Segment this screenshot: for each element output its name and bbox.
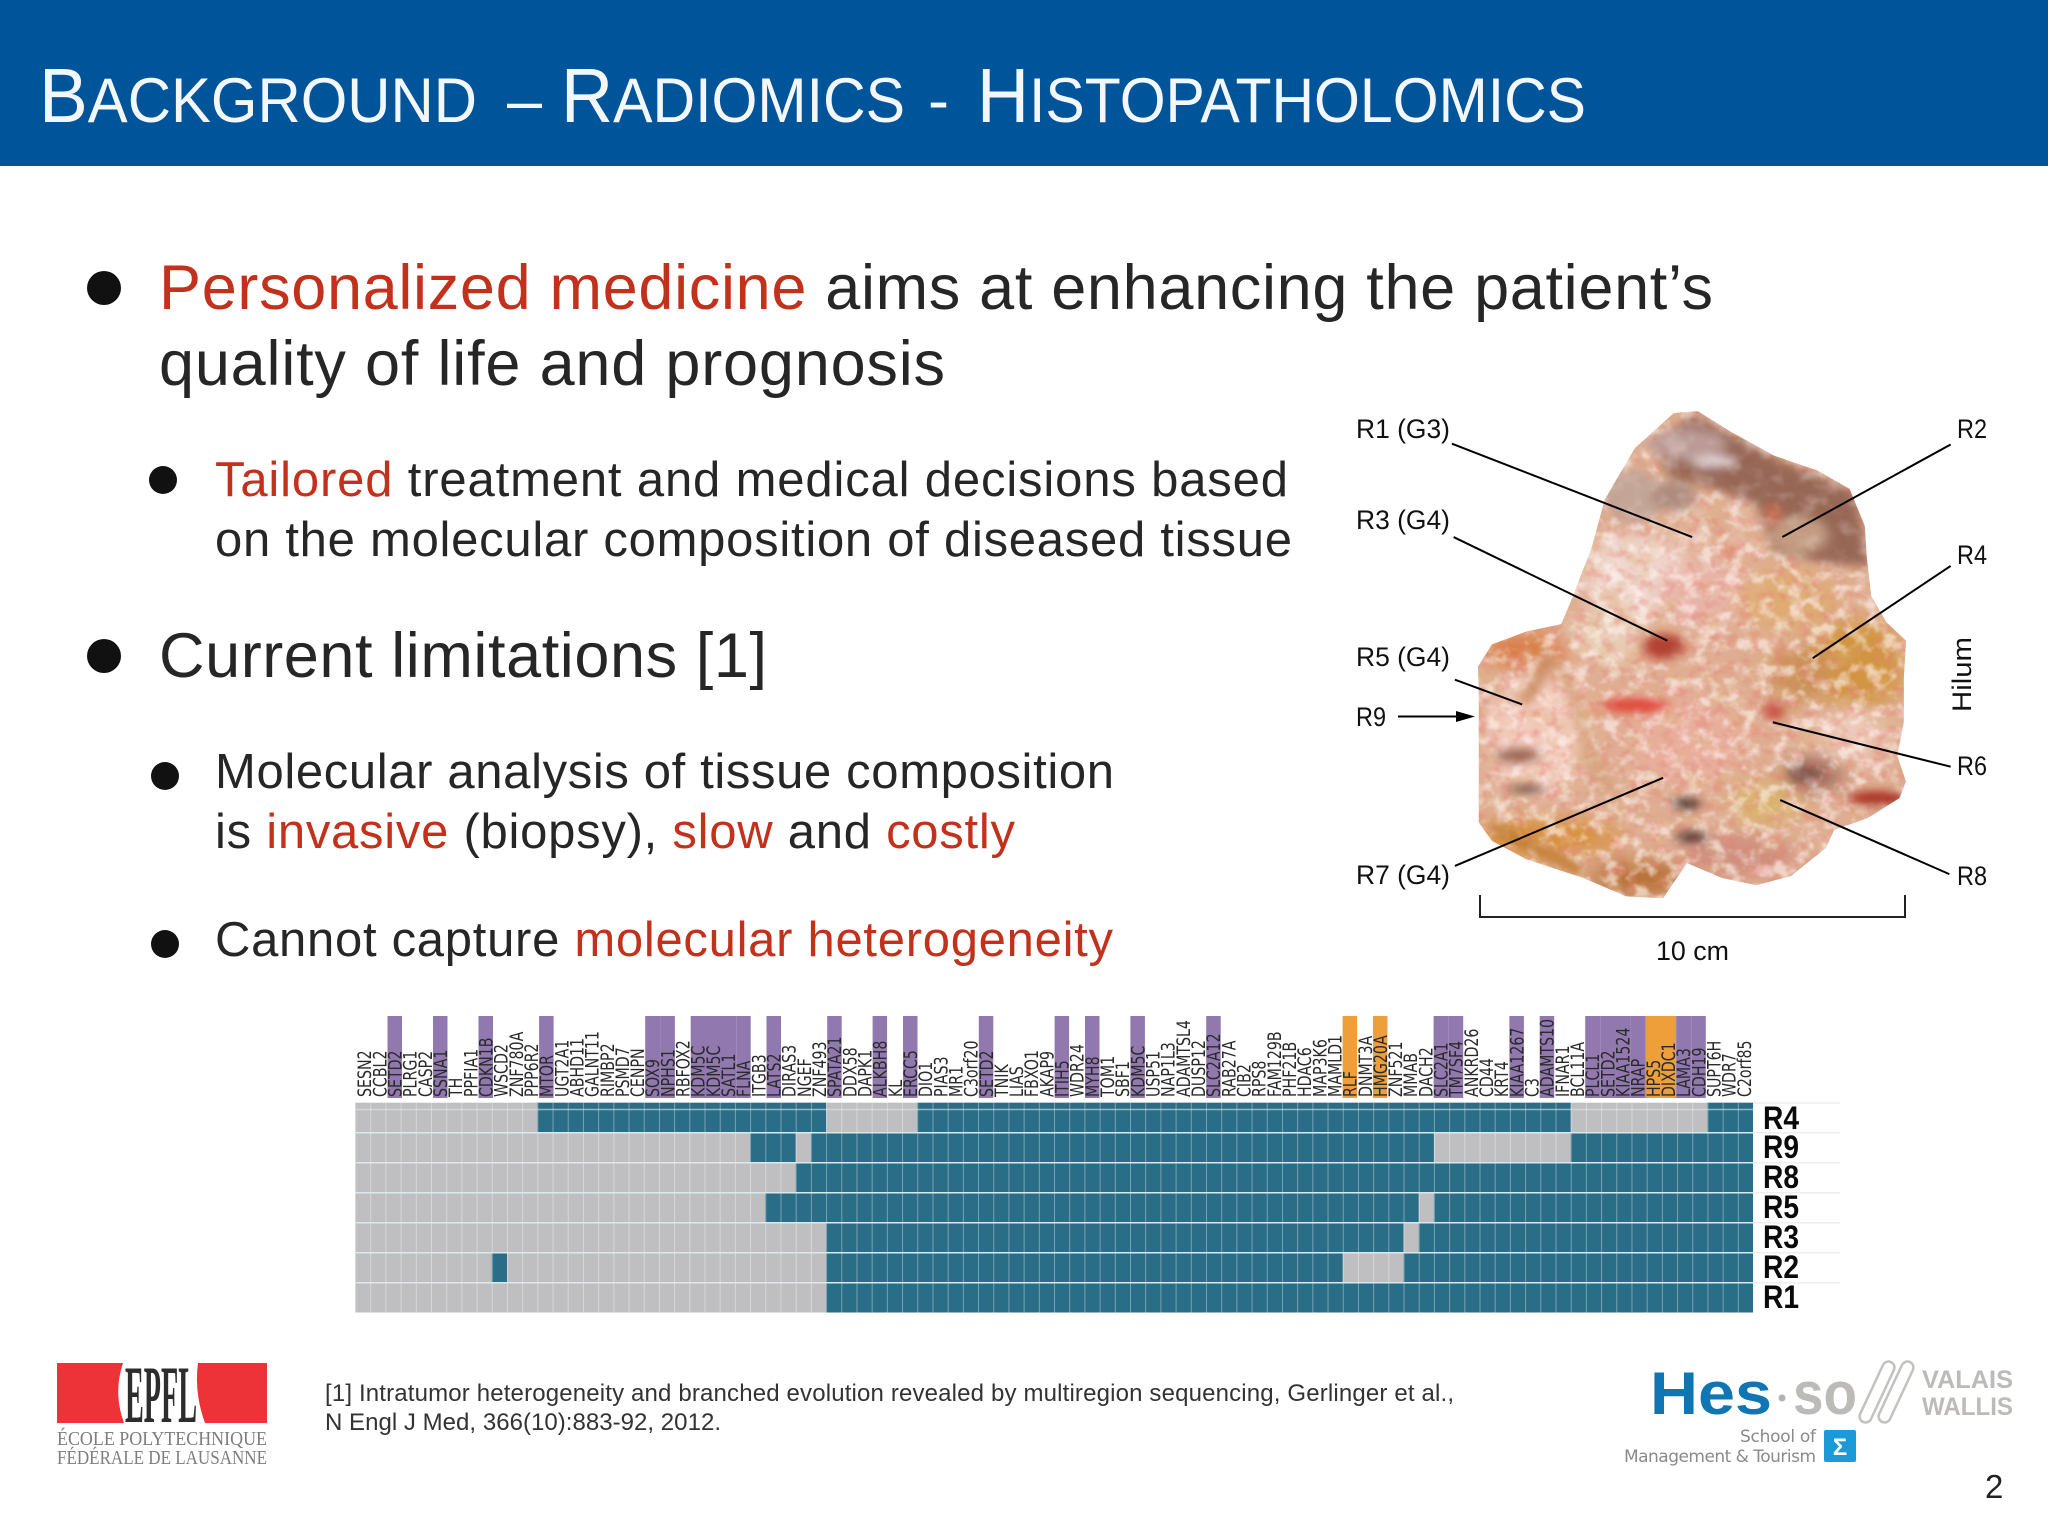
tumor region labels: R8 bbox=[1957, 861, 1987, 891]
sub-bullet: invasive slow costly bbox=[151, 745, 1114, 859]
gene name labels: SESN2 bbox=[354, 1050, 376, 1097]
gene name labels: DDX58 bbox=[840, 1047, 861, 1097]
logo: HES-SO Valais Wallis: VALAIS bbox=[1922, 1366, 2013, 1394]
gene name labels: PLRG1 bbox=[400, 1051, 421, 1097]
gene name labels: DIXDC1 bbox=[1658, 1042, 1679, 1097]
gene name labels: FAM129B bbox=[1264, 1031, 1285, 1097]
gene name labels: HDAC6 bbox=[1294, 1047, 1316, 1097]
gene name labels: LIAS bbox=[1006, 1066, 1028, 1097]
gene name labels: HMG20A bbox=[1370, 1035, 1391, 1097]
gene name labels: DAPK1 bbox=[855, 1050, 876, 1097]
gene name labels: SBF1 bbox=[1112, 1061, 1134, 1097]
bullet: current limitations: Current limitations [1] bbox=[159, 621, 767, 691]
sub-bullet: invasive slow costly: Molecular analysis of tissue composition bbox=[215, 745, 1114, 799]
gene name labels: ANKRD26 bbox=[1461, 1029, 1482, 1097]
tumor annotation lines bbox=[1452, 444, 1951, 874]
tumor region labels: R5 (G4) bbox=[1356, 642, 1450, 672]
gene name labels: ZNF493 bbox=[809, 1041, 830, 1097]
gene name labels: DUSP12 bbox=[1188, 1040, 1209, 1097]
gene name labels: MAMLD1 bbox=[1325, 1035, 1346, 1097]
heatmap row labels: R4 bbox=[1763, 1100, 1799, 1136]
gene name labels: PPFIA1 bbox=[461, 1049, 482, 1097]
gene name labels: SATL1 bbox=[718, 1054, 739, 1097]
gene name labels: KDM5C bbox=[1128, 1046, 1149, 1097]
gene name labels: PLCL1 bbox=[1582, 1054, 1604, 1097]
gene name labels: DIO1 bbox=[915, 1062, 937, 1097]
gene name labels: ERCC5 bbox=[900, 1050, 921, 1097]
tumor region labels: R2 bbox=[1957, 414, 1987, 444]
gene name labels: DACH2 bbox=[1416, 1047, 1437, 1097]
tumor region labels: 10 cm bbox=[1656, 936, 1729, 966]
title: – bbox=[507, 66, 542, 136]
gene name labels: HPS5 bbox=[1643, 1060, 1664, 1097]
gene name labels: ZNF780A bbox=[506, 1031, 527, 1097]
gene name labels: KDM5C bbox=[703, 1046, 724, 1097]
gene name labels: RPS8 bbox=[1249, 1061, 1270, 1097]
gene name labels: CDKN1B bbox=[476, 1037, 497, 1097]
logo: EPFL: EPFL bbox=[125, 1349, 197, 1440]
gene name labels: IFNAR1 bbox=[1552, 1045, 1573, 1097]
gene name labels: UGT2A1 bbox=[552, 1040, 573, 1097]
gene name labels: PPP6R2 bbox=[521, 1043, 542, 1097]
gene name labels: C2orf85 bbox=[1734, 1040, 1755, 1097]
gene name labels: NGEF bbox=[794, 1058, 815, 1097]
gene name labels: ADAMTSL4 bbox=[1173, 1020, 1194, 1097]
gene name labels: SETD2 bbox=[385, 1050, 406, 1097]
gene name labels: SETD2 bbox=[976, 1050, 997, 1097]
gene name labels: CASP2 bbox=[415, 1051, 436, 1097]
gene name labels: CIB2 bbox=[1234, 1064, 1255, 1097]
heatmap row labels bbox=[1763, 1100, 1799, 1315]
tumor region labels: R4 bbox=[1957, 540, 1987, 570]
gene name labels: ADAMTS10 bbox=[1537, 1019, 1558, 1097]
gene name labels: KIAA1267 bbox=[1507, 1028, 1528, 1097]
tumor region labels bbox=[1356, 414, 1987, 966]
gene name labels: DIRAS3 bbox=[779, 1045, 800, 1097]
gene name labels: ITIH5 bbox=[1052, 1060, 1073, 1097]
gene name labels: PHF21B bbox=[1279, 1042, 1300, 1097]
logo: HES-SO Valais Wallis: Σ bbox=[1833, 1434, 1847, 1461]
reference citation bbox=[325, 1380, 1454, 1436]
gene name labels: RBFOX2 bbox=[673, 1040, 694, 1097]
gene name labels: TOM1 bbox=[1097, 1056, 1118, 1098]
title bbox=[39, 53, 1586, 139]
gene name labels: BCL11A bbox=[1567, 1041, 1588, 1097]
heatmap row labels: R2 bbox=[1763, 1249, 1799, 1285]
bullet: personalized medicine bbox=[87, 253, 1713, 399]
logo: HES-SO Valais Wallis: School of bbox=[1740, 1427, 1817, 1447]
gene name labels: PSMD7 bbox=[612, 1047, 633, 1097]
gene name labels: TNIK bbox=[991, 1063, 1012, 1098]
heatmap row labels: R5 bbox=[1763, 1189, 1799, 1225]
sub-bullet: molecular heterogeneity: Cannot capture molecular heterogeneity bbox=[215, 913, 1114, 967]
gene name labels: TM7SF4 bbox=[1446, 1041, 1467, 1098]
logo: HES-SO Valais Wallis: Management & Tourism bbox=[1624, 1447, 1816, 1467]
gene name labels: ALKBH8 bbox=[870, 1041, 891, 1097]
tumor region labels: R1 (G3) bbox=[1356, 414, 1450, 444]
gene name labels: FBXO1 bbox=[1021, 1050, 1043, 1097]
gene highlights: purple and orange bbox=[388, 1016, 1706, 1098]
gene name labels: RLF bbox=[1340, 1071, 1361, 1097]
gene name labels: FLNA bbox=[733, 1060, 755, 1097]
tumor region labels: R7 (G4) bbox=[1356, 860, 1450, 890]
bullet: personalized medicine: Personalized medicine aims at enhancing the patient’s bbox=[159, 253, 1713, 323]
gene name labels: WDR24 bbox=[1067, 1044, 1088, 1097]
gene name labels: NRAP bbox=[1628, 1059, 1649, 1097]
heatmap row labels: R9 bbox=[1763, 1129, 1799, 1165]
logo: HES-SO Valais Wallis bbox=[1624, 1360, 2013, 1467]
title: BACKGROUND bbox=[39, 53, 477, 139]
gene name labels: SLC2A1 bbox=[1431, 1042, 1452, 1097]
scale bar: 10 cm bbox=[1480, 895, 1905, 917]
gene name labels: MTOR bbox=[536, 1055, 558, 1097]
gene name labels: GALNT11 bbox=[582, 1031, 603, 1097]
gene name labels: RAB27A bbox=[1219, 1040, 1240, 1097]
gene name labels: CDH19 bbox=[1689, 1047, 1710, 1097]
gene name labels: ZNF521 bbox=[1385, 1041, 1407, 1097]
gene name labels: MMAB bbox=[1400, 1053, 1422, 1097]
page number: 2 bbox=[1985, 1468, 2003, 1505]
gene name labels: CCBL2 bbox=[370, 1051, 391, 1097]
gene name labels: WSCD2 bbox=[491, 1044, 512, 1097]
logo: HES-SO Valais Wallis: WALLIS bbox=[1922, 1393, 2013, 1421]
gene name labels: NAP1L3 bbox=[1158, 1042, 1179, 1097]
reference citation: [1] Intratumor heterogeneity and branched evolution revealed by multiregion sequencing, Gerlinger et al., bbox=[325, 1380, 1454, 1407]
gene name labels: KL bbox=[885, 1079, 906, 1097]
bullet: personalized medicine: quality of life and prognosis bbox=[159, 329, 945, 399]
gene name labels bbox=[354, 1019, 1755, 1098]
tumor region labels: R3 (G4) bbox=[1356, 505, 1450, 535]
gene name labels: PIAS3 bbox=[931, 1057, 952, 1097]
gene name labels: SUPT6H bbox=[1704, 1041, 1725, 1097]
logo: EPFL bbox=[57, 1349, 267, 1469]
tumor region labels: R6 bbox=[1957, 751, 1987, 781]
gene name labels: USP51 bbox=[1143, 1051, 1164, 1097]
tumor region labels: R9 bbox=[1356, 702, 1386, 732]
gene name labels: CENPN bbox=[627, 1048, 649, 1097]
gene name labels: C3 bbox=[1522, 1078, 1543, 1097]
logo: EPFL: ÉCOLE POLYTECHNIQUE bbox=[57, 1427, 267, 1450]
reference citation: N Engl J Med, 366(10):883-92, 2012. bbox=[325, 1409, 721, 1436]
gene name labels: RIMBP2 bbox=[597, 1043, 618, 1097]
gene name labels: ITGB3 bbox=[749, 1054, 770, 1097]
gene name labels: KRT4 bbox=[1491, 1061, 1513, 1097]
logo: EPFL: FÉDÉRALE DE LAUSANNE bbox=[57, 1446, 267, 1469]
heatmap row labels: R3 bbox=[1763, 1219, 1799, 1255]
sub-bullet: invasive slow costly: is invasive (biopsy), slow and costly bbox=[215, 805, 1016, 859]
title: RADIOMICS bbox=[561, 53, 905, 139]
gene name labels: MYH8 bbox=[1082, 1056, 1103, 1097]
gene name labels: CD44 bbox=[1476, 1058, 1497, 1097]
title: HISTOPATHOLOMICS bbox=[977, 53, 1586, 139]
gene name labels: ABHD11 bbox=[567, 1038, 588, 1097]
gene name labels: SOX9 bbox=[642, 1059, 664, 1097]
tumor photograph bbox=[1470, 400, 1912, 904]
gene name labels: WDR7 bbox=[1719, 1053, 1740, 1097]
tumor region labels: Hilum bbox=[1947, 637, 1977, 712]
gene name labels: SLC2A12 bbox=[1203, 1033, 1225, 1097]
gene name labels: AKAP9 bbox=[1037, 1051, 1058, 1097]
gene name labels: MR1 bbox=[946, 1066, 967, 1097]
gene name labels: MAP3K6 bbox=[1310, 1039, 1331, 1097]
sub-bullet: tailored treatment bbox=[149, 453, 1292, 567]
gene name labels: C3orf20 bbox=[961, 1040, 982, 1097]
gene name labels: SETD2 bbox=[1598, 1050, 1619, 1097]
logo: HES-SO Valais Wallis: Hes bbox=[1650, 1360, 1772, 1427]
gene name labels: NPHS1 bbox=[658, 1049, 679, 1097]
gene name labels: SPATA21 bbox=[824, 1036, 846, 1097]
gene name labels: LATS2 bbox=[764, 1053, 785, 1097]
gene name labels: DNMT3A bbox=[1355, 1035, 1376, 1097]
header bar bbox=[0, 0, 2048, 166]
title: - bbox=[928, 66, 949, 136]
gene name labels: KIAA1524 bbox=[1613, 1028, 1634, 1097]
gene name labels: KDM5C bbox=[688, 1046, 709, 1097]
heatmap row labels: R8 bbox=[1763, 1159, 1799, 1195]
arrow: R9 bbox=[1398, 711, 1475, 722]
heatmap: mutation presence by region bbox=[355, 1103, 1840, 1312]
logo: HES-SO Valais Wallis: so bbox=[1793, 1360, 1857, 1427]
gene name labels: SSNA1 bbox=[430, 1050, 451, 1097]
gene name labels: LAMA3 bbox=[1673, 1048, 1695, 1097]
gene name labels: TH bbox=[445, 1078, 467, 1098]
sub-bullet: tailored treatment: on the molecular composition of diseased tissue bbox=[215, 513, 1292, 567]
heatmap row labels: R1 bbox=[1763, 1279, 1799, 1315]
sub-bullet: tailored treatment: Tailored treatment and medical decisions based bbox=[215, 453, 1288, 507]
